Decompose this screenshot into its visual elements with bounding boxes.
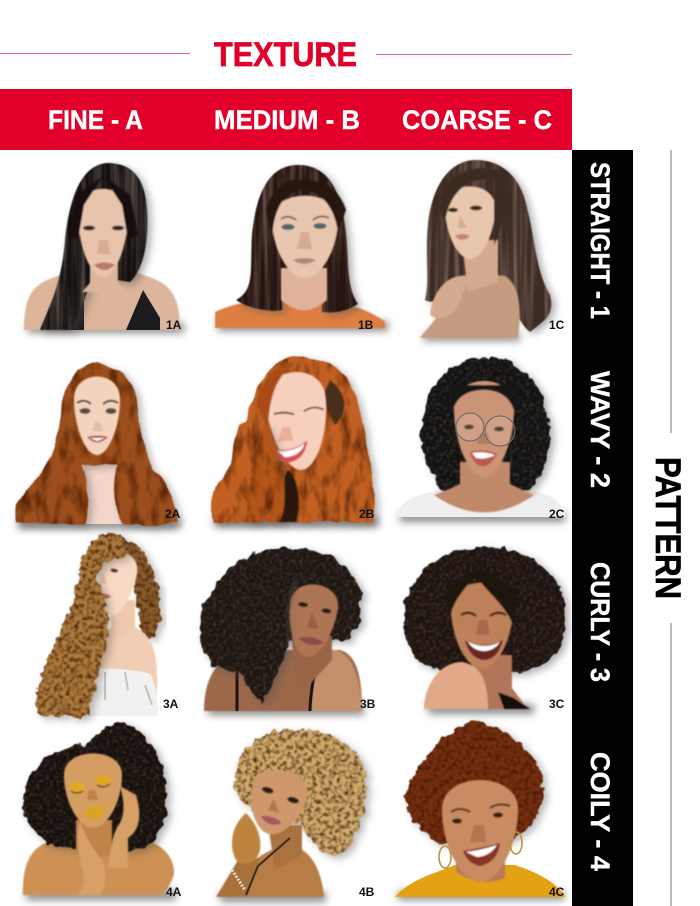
label 4B: 4B [359,885,375,899]
side band: pattern rows: COILY - 4 [585,752,615,871]
portrait 2A [15,363,181,529]
header band: texture columns: MEDIUM - B [214,105,360,135]
label 4A: 4A [166,885,182,899]
portrait 1B [215,165,388,332]
title: texture: TEXTURE [214,36,357,74]
portrait 2C [397,358,566,522]
label 1A: 1A [166,318,182,332]
label 1C: 1C [549,318,565,332]
icon: glasses [456,413,515,446]
label 1B: 1B [358,318,374,332]
label 4C: 4C [549,885,565,899]
icon: hoop earrings [439,832,522,868]
portrait 2B [212,357,378,527]
portrait 4A [23,722,182,900]
side band: pattern rows: STRAIGHT - 1 [585,162,615,319]
portrait 3C [403,547,566,714]
header band: texture columns: COARSE - C [402,105,552,135]
portrait 3A [37,532,179,716]
label 2A: 2A [165,507,181,521]
label 3A: 3A [163,697,179,711]
hands [78,786,139,895]
portrait 4C [395,720,565,900]
portrait 1C [420,160,565,341]
portrait 4B [216,730,375,902]
portrait 1A [24,163,184,333]
label 3C: 3C [549,697,565,711]
side band: pattern rows: CURLY - 3 [585,562,615,682]
side band: pattern rows [572,150,633,906]
header band: texture columns [0,89,572,150]
side band: pattern rows: WAVY - 2 [585,371,615,488]
header band: texture columns: FINE - A [48,105,143,135]
label 3B: 3B [360,697,376,711]
label 2C: 2C [549,507,565,521]
title: pattern: PATTERN [648,457,687,599]
label 2B: 2B [359,507,375,521]
portrait 3B [200,548,376,715]
